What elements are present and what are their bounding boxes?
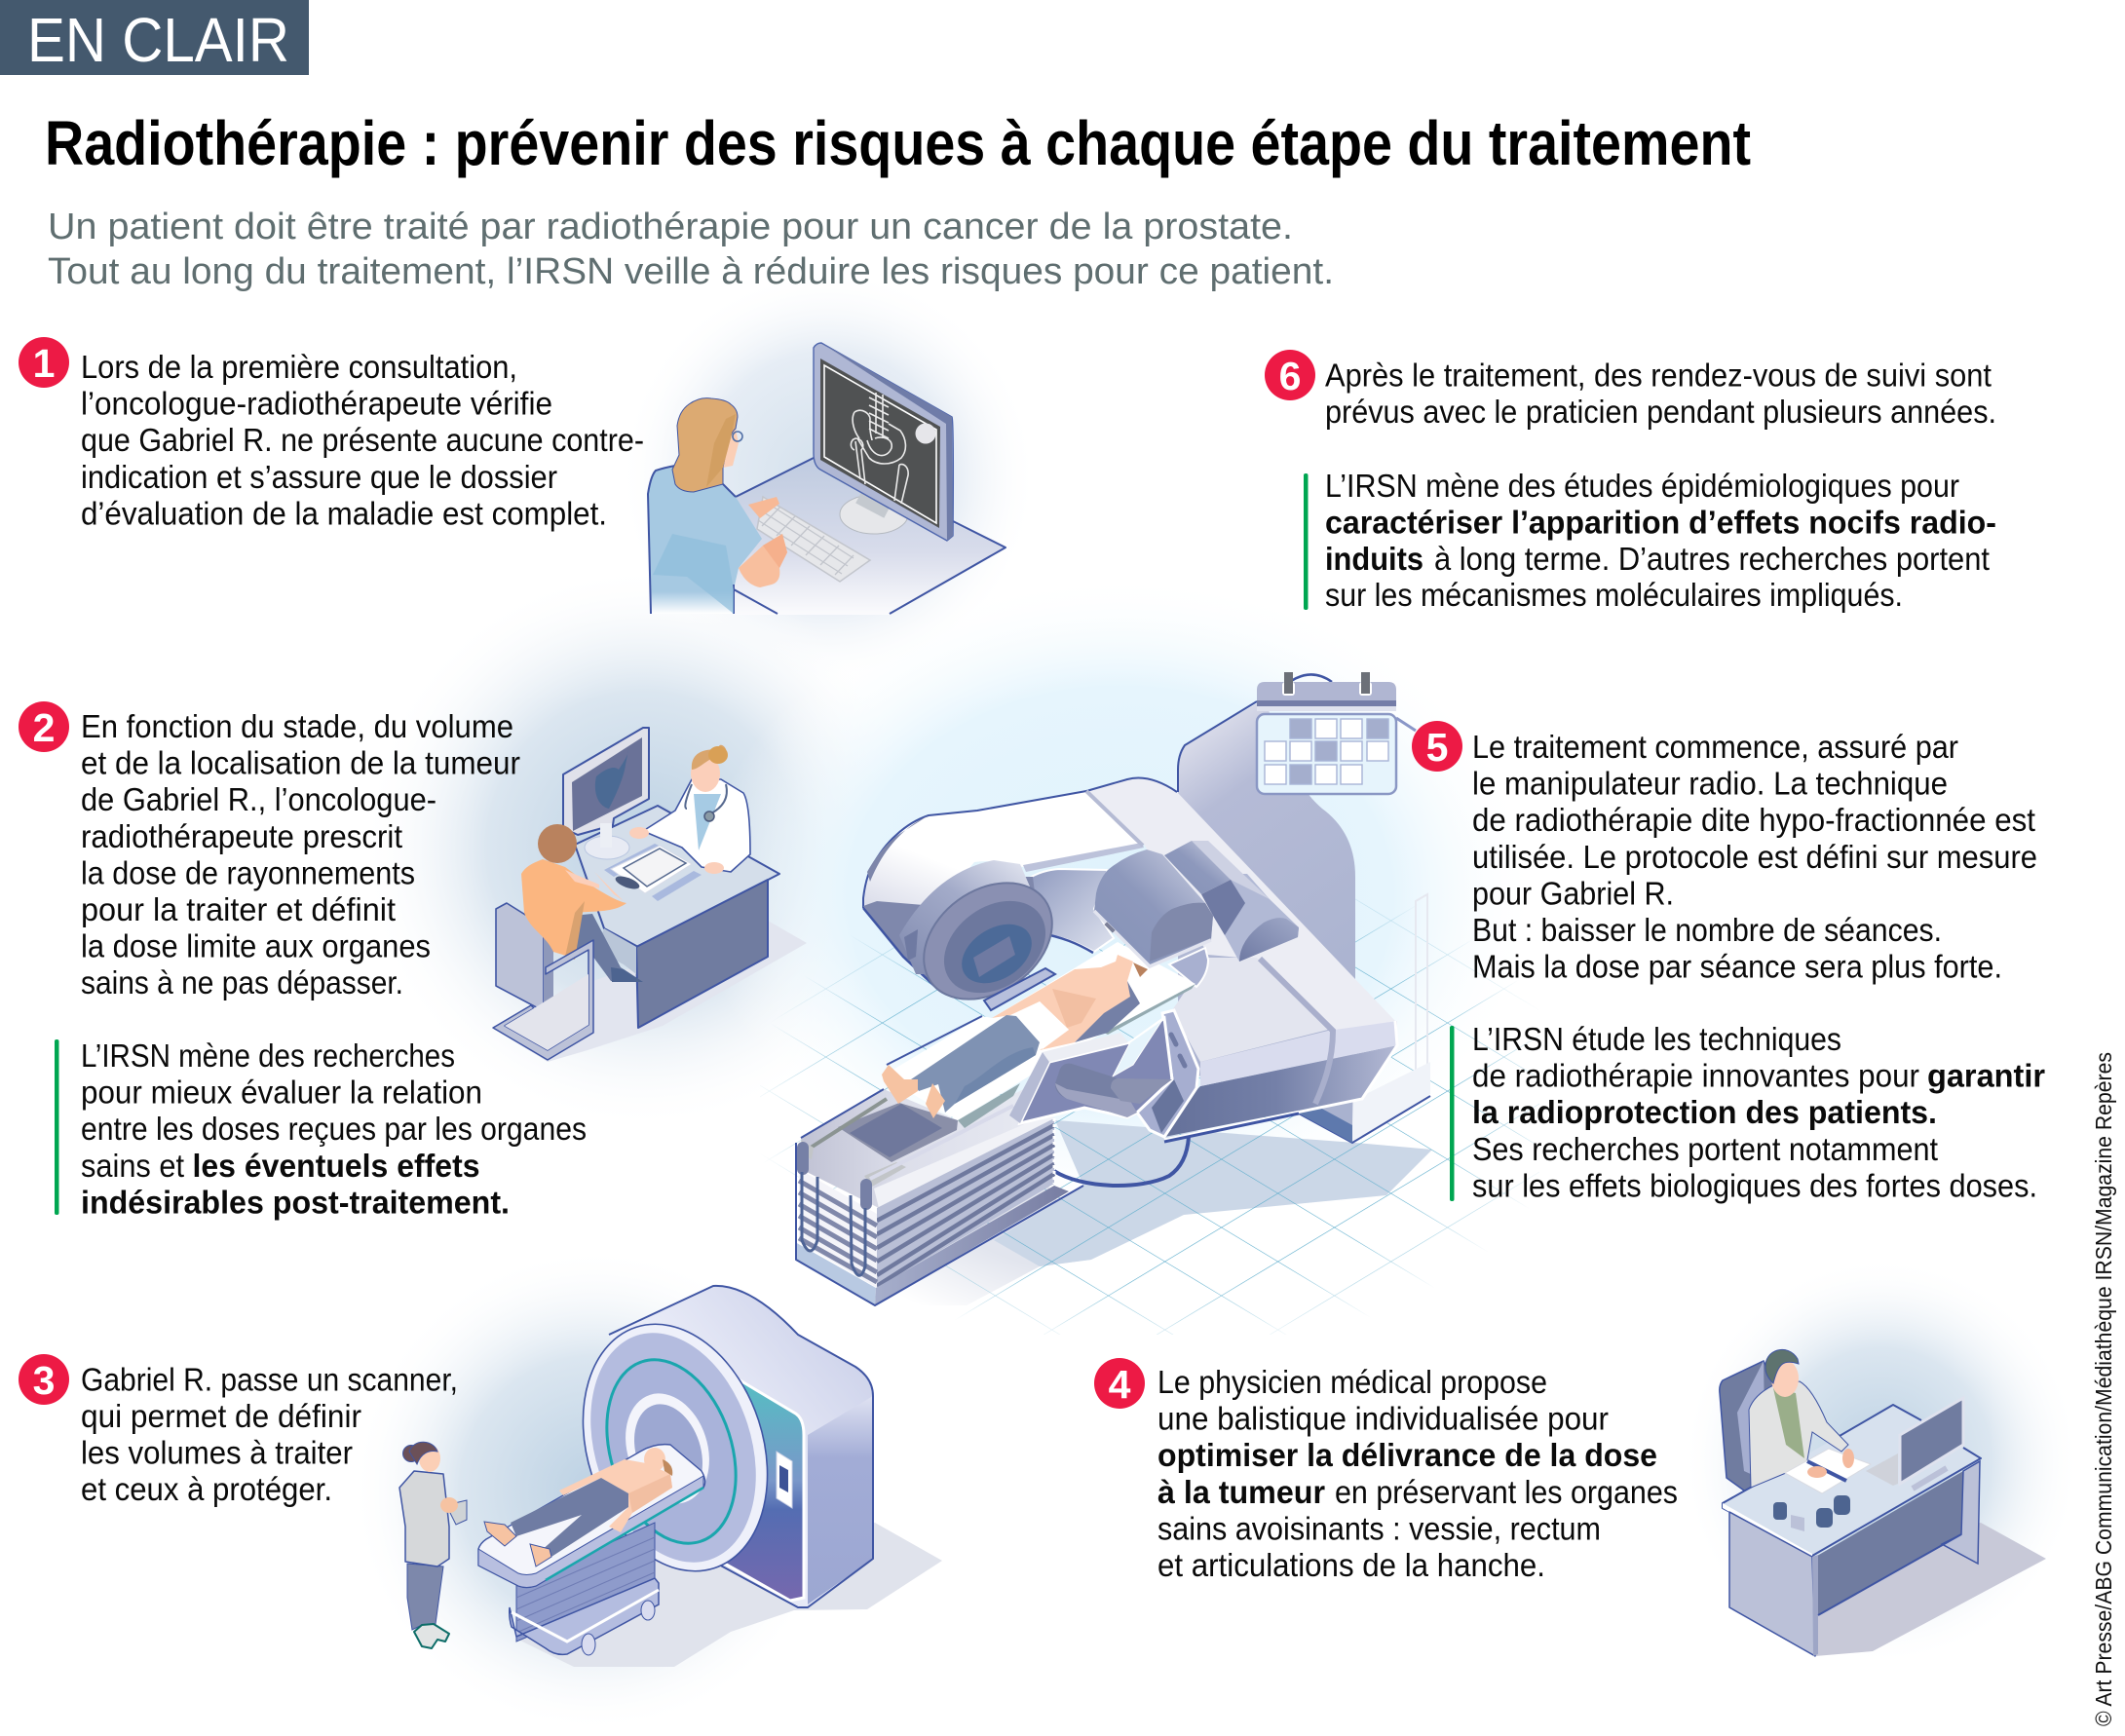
background glow: consultation 1 xyxy=(619,268,1038,687)
step 4 text: à la tumeur xyxy=(1157,1474,1325,1510)
step 3 text: et ceux à protéger. xyxy=(81,1471,332,1507)
lower gantry box xyxy=(1155,948,1397,1142)
step 5 IRSN note: la radioprotection des patients. xyxy=(1472,1094,1937,1130)
step 2 IRSN note: pour mieux évaluer la relation xyxy=(81,1075,482,1111)
step 5 IRSN note xyxy=(1450,1021,2045,1203)
illustration 2: doctor and patient at desk xyxy=(493,728,807,1062)
header tag: EN CLAIR xyxy=(27,5,289,75)
background glow: physicist 4 xyxy=(1682,1257,2081,1666)
step 4 text: et articulations de la hanche. xyxy=(1157,1547,1545,1583)
step 5 text: pour Gabriel R. xyxy=(1472,875,1674,911)
step 3 number xyxy=(19,1354,69,1405)
step 1 number xyxy=(19,337,69,388)
step 6 IRSN note: L’IRSN mène des études épidémiologiques pour xyxy=(1325,468,1959,504)
column xyxy=(1178,703,1355,1125)
step 6 IRSN note: caractériser l’apparition d’effets nocifs radio- xyxy=(1325,505,1996,541)
couch top and patient xyxy=(882,942,1195,1128)
step 4 number: 4 xyxy=(1109,1362,1131,1407)
step 2 IRSN note: sains et xyxy=(81,1148,184,1184)
crescent behind head xyxy=(1028,869,1114,952)
step 5 IRSN note: garantir xyxy=(1927,1058,2045,1094)
illustration 5: linear accelerator with patient xyxy=(795,672,1430,1305)
step 2 text: En fonction du stade, du volume xyxy=(81,708,513,744)
step 1 text: Lors de la première consultation, xyxy=(81,349,517,385)
step 4 text: en préservant les organes xyxy=(1335,1474,1678,1510)
photo credit: © Art Presse/ABG Communication/Médiathèque IRSN/Magazine Repères xyxy=(2091,1052,2116,1726)
couch control arm xyxy=(1009,1010,1198,1137)
step 6 text xyxy=(1325,358,1996,430)
wall panel xyxy=(1416,894,1427,1096)
step 6 number xyxy=(1265,350,1315,400)
step 5 text: Le traitement commence, assuré par xyxy=(1472,729,1958,765)
step 6 IRSN note: à long terme. D’autres recherches portent xyxy=(1434,541,1990,577)
step 2 text: pour la traiter et définit xyxy=(81,891,396,927)
step 3 text xyxy=(81,1361,458,1507)
step 6 IRSN note xyxy=(1304,468,1996,613)
step 5 IRSN note: Ses recherches portent notamment xyxy=(1472,1131,1938,1167)
step 5 IRSN note: sur les effets biologiques des fortes doses. xyxy=(1472,1167,2037,1203)
background glow: treatment room xyxy=(702,575,1539,1218)
step 2 text: la dose de rayonnements xyxy=(81,854,415,890)
step 5 text: But : baisser le nombre de séances. xyxy=(1472,912,1942,948)
step 4 number xyxy=(1094,1358,1145,1409)
machine base xyxy=(1352,1062,1430,1143)
step 2 IRSN note: entre les doses reçues par les organes xyxy=(81,1111,587,1147)
couch arm behind patient xyxy=(984,968,1055,1010)
step 3 number: 3 xyxy=(33,1358,55,1403)
step 2 IRSN note: indésirables post-traitement. xyxy=(81,1184,510,1220)
step 2 number xyxy=(19,701,69,752)
step 5 IRSN note: L’IRSN étude les techniques xyxy=(1472,1021,1841,1057)
step 6 IRSN note: induits xyxy=(1325,541,1423,577)
scanner table pedestal xyxy=(510,1523,659,1655)
step 5 number xyxy=(1412,721,1462,772)
calendar xyxy=(1257,672,1416,794)
step 2 IRSN note: L’IRSN mène des recherches xyxy=(81,1038,455,1074)
subtitle xyxy=(48,207,1334,292)
step 3 text: les volumes à traiter xyxy=(81,1435,353,1471)
CT patient xyxy=(484,1448,672,1566)
illustration 3: CT scanner with patient and technician xyxy=(399,1286,942,1667)
step 5 text: le manipulateur radio. La technique xyxy=(1472,766,1948,802)
floor ring xyxy=(1054,1137,1189,1186)
illustration 4: medical physicist at desk xyxy=(1720,1349,2046,1656)
step 2 text xyxy=(81,708,520,1000)
step 1 text: indication et s’assure que le dossier xyxy=(81,459,557,495)
step 4 text: optimiser la délivrance de la dose xyxy=(1157,1437,1657,1473)
subtitle: Tout au long du traitement, l’IRSN veille à réduire les risques pour ce patient. xyxy=(48,251,1334,292)
step 2 IRSN note: les éventuels effets xyxy=(193,1148,479,1184)
subtitle: Un patient doit être traité par radiothérapie pour un cancer de la prostate. xyxy=(48,207,1293,247)
step 2 text: et de la localisation de la tumeur xyxy=(81,745,520,781)
technician xyxy=(399,1442,467,1648)
step 2 number: 2 xyxy=(33,705,55,750)
step 4 text: sains avoisinants : vessie, rectum xyxy=(1157,1510,1601,1546)
step 2 text: la dose limite aux organes xyxy=(81,928,431,964)
step 1 text: que Gabriel R. ne présente aucune contre- xyxy=(81,422,644,458)
step 6 text: Après le traitement, des rendez-vous de suivi sont xyxy=(1325,358,1992,394)
step 6 text: prévus avec le praticien pendant plusieurs années. xyxy=(1325,394,1996,430)
step 1 text xyxy=(81,349,644,531)
background glow: scanner 3 xyxy=(351,1247,838,1734)
step 1 text: d’évaluation de la maladie est complet. xyxy=(81,495,607,531)
step 3 text: Gabriel R. passe un scanner, xyxy=(81,1361,458,1397)
step 5 IRSN note: de radiothérapie innovantes pour xyxy=(1472,1058,1919,1094)
radiation head drum xyxy=(863,859,1075,1023)
gantry upper arm and ring housing xyxy=(863,778,1177,950)
step 5 text: Mais la dose par séance sera plus forte. xyxy=(1472,949,2002,985)
step 5 text xyxy=(1472,729,2037,985)
step 5 text: utilisée. Le protocole est défini sur mesure xyxy=(1472,839,2037,875)
step 1 number: 1 xyxy=(33,341,55,386)
step 6 number: 6 xyxy=(1279,354,1301,398)
step 3 text: qui permet de définir xyxy=(81,1398,361,1434)
collimator head xyxy=(1094,841,1299,966)
background glow: prescription 2 xyxy=(360,565,926,1130)
step 5 number: 5 xyxy=(1426,725,1448,770)
step 6 IRSN note: sur les mécanismes moléculaires impliqués. xyxy=(1325,577,1903,613)
step 4 text xyxy=(1157,1364,1678,1583)
step 2 text: radiothérapeute prescrit xyxy=(81,818,402,854)
step 2 text: sains à ne pas dépasser. xyxy=(81,964,403,1000)
scanner table top xyxy=(478,1445,705,1588)
couch base scissor xyxy=(795,1088,1083,1305)
treatment room floor shadow and grid xyxy=(760,877,1539,1335)
title: Radiothérapie : prévenir des risques à chaque étape du traitement xyxy=(45,108,1751,178)
gantry arm diagonal xyxy=(1086,777,1395,1033)
step 4 text: Le physicien médical propose xyxy=(1157,1364,1547,1400)
step 2 IRSN note xyxy=(55,1038,587,1220)
step 4 text: une balistique individualisée pour xyxy=(1157,1401,1609,1437)
step 2 text: de Gabriel R., l’oncologue- xyxy=(81,781,436,817)
illustration 1: oncologist at monitor xyxy=(648,343,1006,615)
step 5 text: de radiothérapie dite hypo-fractionnée est xyxy=(1472,802,2035,838)
step 1 text: l’oncologue-radiothérapeute vérifie xyxy=(81,386,552,422)
